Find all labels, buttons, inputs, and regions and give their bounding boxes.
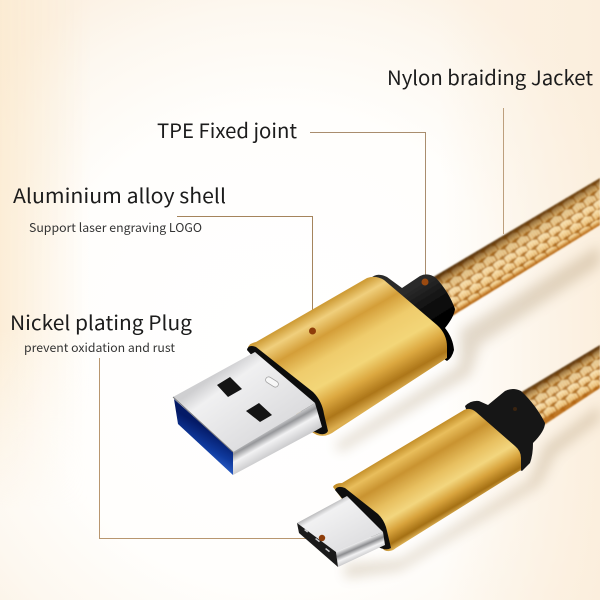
USB-C cable — [297, 345, 600, 567]
USB-C connector front — [336, 532, 385, 567]
lower black collar — [465, 389, 545, 471]
marker dots — [309, 278, 428, 541]
product shadows — [335, 245, 600, 578]
leader line: TPE Fixed joint — [310, 132, 426, 278]
leader line: Aluminium alloy shell — [177, 216, 312, 331]
plug blue insert — [174, 399, 233, 475]
lower braided jacket — [520, 345, 600, 425]
label: TPE Fixed joint: TPE Fixed joint — [157, 115, 297, 144]
note: prevent oxidation and rust: prevent oxidation and rust — [24, 339, 175, 356]
aluminium shell — [333, 409, 521, 551]
plug front face — [233, 403, 322, 475]
USB-C contacts — [304, 529, 330, 552]
USB-C connector top — [297, 496, 383, 552]
plug black lip — [247, 346, 328, 434]
upper black collar — [371, 274, 455, 361]
note: Support laser engraving LOGO: Support laser engraving LOGO — [29, 219, 202, 236]
leader line: Nylon braiding Jacket — [502, 108, 504, 234]
leader line: Nickel plating Plug — [100, 358, 322, 538]
plug pin mark — [264, 376, 280, 388]
upper braided jacket — [430, 178, 600, 316]
collar dot — [513, 407, 517, 411]
plug top edge line — [173, 397, 233, 452]
plug top face — [173, 352, 315, 452]
USB-C black lip — [335, 487, 391, 549]
USB-A cable — [173, 178, 600, 475]
label: Nylon braiding Jacket: Nylon braiding Jacket — [387, 62, 593, 91]
aluminium shell — [248, 277, 447, 436]
USB-C port opening — [297, 523, 338, 567]
plug window left — [217, 377, 242, 397]
label: Aluminium alloy shell: Aluminium alloy shell — [13, 180, 226, 209]
plug window right — [246, 403, 272, 422]
label: Nickel plating Plug: Nickel plating Plug — [10, 307, 192, 336]
